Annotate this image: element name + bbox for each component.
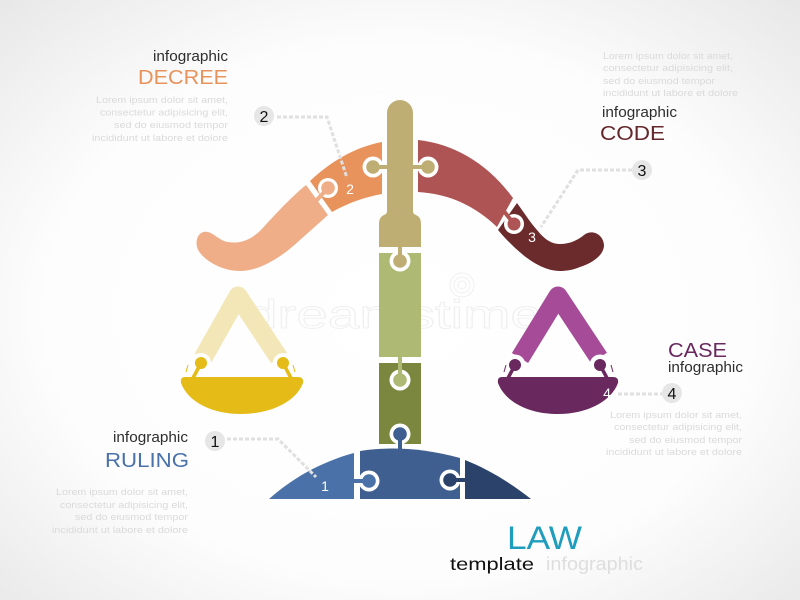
badge 4 bbox=[662, 383, 682, 403]
number 2 on beam: 2 bbox=[346, 181, 354, 197]
title bbox=[450, 520, 643, 574]
knob base top bbox=[390, 424, 410, 450]
number 4 on bowl: 4 bbox=[603, 385, 611, 401]
text block: ruling bbox=[52, 430, 189, 536]
column segment dark green bbox=[379, 363, 421, 444]
watermark bbox=[246, 273, 542, 337]
title: template bbox=[450, 554, 534, 574]
text block: case: consectetur adipisicing elit, bbox=[614, 422, 742, 433]
text block: ruling: Lorem ipsum dolor sit amet, bbox=[56, 487, 188, 498]
scale beam left: decree bbox=[197, 142, 382, 271]
text block: code: infographic bbox=[602, 105, 677, 121]
text block: case: infographic bbox=[668, 360, 743, 376]
beam segment red bbox=[418, 140, 513, 227]
text block: decree: sed do eiusmod tempor bbox=[114, 120, 228, 131]
left pan: yellow bbox=[181, 296, 303, 414]
central column bbox=[362, 100, 438, 444]
badge 3 bbox=[632, 160, 652, 180]
beam segment orange bbox=[310, 142, 382, 212]
beam segment light orange bbox=[197, 185, 328, 271]
callout 4 connector bbox=[618, 392, 662, 396]
text block: decree: DECREE bbox=[138, 66, 228, 89]
column segment tan bbox=[379, 100, 421, 247]
text block: code: incididunt ut labore et dolore bbox=[603, 88, 738, 99]
pan bowl bbox=[498, 377, 618, 414]
base segment right bbox=[465, 460, 531, 499]
scale beam right: code bbox=[418, 140, 604, 271]
watermark: dreamstime bbox=[246, 293, 542, 337]
right hook bbox=[273, 353, 295, 378]
knob tan right bbox=[411, 156, 438, 178]
left hook bbox=[504, 354, 526, 378]
knob base left bbox=[352, 470, 380, 492]
text block: case: Lorem ipsum dolor sit amet, bbox=[610, 410, 742, 421]
callout 1 connector bbox=[227, 439, 316, 477]
knob base right bbox=[440, 470, 467, 490]
badge 2: 2 bbox=[260, 109, 269, 126]
knob light green bbox=[390, 355, 410, 390]
base segment left bbox=[269, 453, 354, 499]
right pan: purple bbox=[498, 296, 618, 414]
badge 1 bbox=[205, 431, 225, 451]
knob tan left bbox=[362, 156, 389, 178]
text block: code bbox=[600, 51, 738, 145]
badge 3: 3 bbox=[638, 163, 647, 180]
badge 1: 1 bbox=[211, 434, 220, 451]
badge 2 bbox=[254, 106, 274, 126]
text block: decree: infographic bbox=[153, 49, 228, 65]
callout 3 connector bbox=[541, 170, 632, 227]
knob tan down bbox=[390, 245, 410, 272]
title: LAW bbox=[507, 520, 583, 556]
number 1 on base: 1 bbox=[321, 478, 329, 494]
pan bowl bbox=[181, 377, 303, 414]
left hook bbox=[186, 353, 211, 378]
text block: decree: incididunt ut labore et dolore bbox=[92, 133, 228, 144]
base segment centre bbox=[360, 449, 460, 499]
text block: ruling: consectetur adipisicing elit, bbox=[60, 500, 188, 511]
text block: code: consectetur adipisicing elit, bbox=[603, 63, 733, 74]
text block: decree: consectetur adipisicing elit, bbox=[100, 108, 228, 118]
number 3 on beam: 3 bbox=[528, 229, 536, 245]
text block: ruling: RULING bbox=[105, 449, 189, 472]
text block: case bbox=[606, 339, 743, 458]
pan arms bbox=[203, 296, 279, 358]
text block: ruling: infographic bbox=[113, 430, 188, 446]
badge 4: 4 bbox=[668, 386, 677, 403]
text block: case: sed do eiusmod tempor bbox=[629, 435, 742, 446]
beam segment dark red bbox=[498, 203, 604, 271]
base bbox=[269, 424, 531, 499]
pan arms bbox=[520, 296, 599, 358]
callout 2 connector bbox=[277, 117, 347, 178]
title: infographic bbox=[546, 554, 643, 574]
right hook bbox=[590, 354, 613, 378]
puzzle knob light orange bbox=[316, 178, 338, 201]
text block: code: sed do eiusmod tempor bbox=[603, 76, 715, 87]
text block: ruling: sed do eiusmod tempor bbox=[75, 512, 188, 523]
text block: case: CASE bbox=[668, 339, 727, 362]
text block: code: CODE bbox=[600, 122, 665, 145]
text block: ruling: incididunt ut labore et dolore bbox=[52, 525, 188, 536]
puzzle knob red bbox=[503, 210, 524, 234]
text block: decree bbox=[92, 49, 228, 144]
column segment light green bbox=[379, 253, 421, 357]
text block: code: Lorem ipsum dolor sit amet, bbox=[603, 51, 733, 62]
text block: decree: Lorem ipsum dolor sit amet, bbox=[96, 95, 228, 106]
text block: case: incididunt ut labore et dolore bbox=[606, 447, 742, 458]
